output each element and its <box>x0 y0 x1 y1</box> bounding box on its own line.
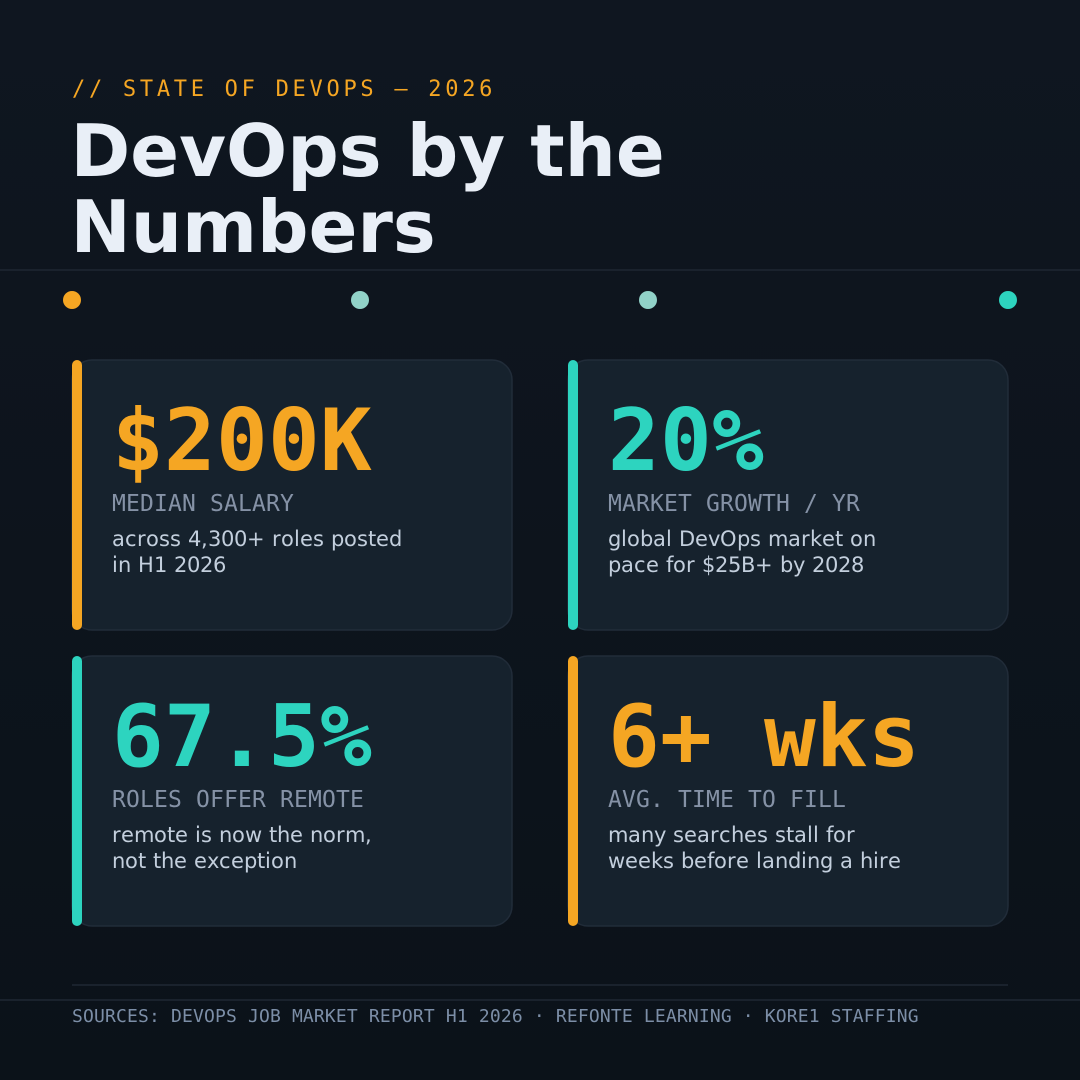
eyebrow label: // STATE OF DEVOPS — 2026 <box>72 77 496 102</box>
panel: remote roles <box>71 655 513 927</box>
card background <box>71 359 513 631</box>
stat description: across 4,300+ roles posted <box>112 527 402 551</box>
stat label: MARKET GROWTH / YR <box>608 491 860 517</box>
stat value: 6+ wks <box>608 687 920 787</box>
accent bar <box>72 656 82 926</box>
stat value: 67.5% <box>112 687 372 787</box>
card background <box>567 359 1009 631</box>
stat description: pace for $25B+ by 2028 <box>608 553 864 577</box>
title: DevOps by the <box>70 109 665 193</box>
stat description <box>608 527 876 577</box>
stat label: MEDIAN SALARY <box>112 491 294 517</box>
stat label: ROLES OFFER REMOTE <box>112 787 364 813</box>
panel: market growth <box>567 359 1009 631</box>
accent bar <box>568 360 578 630</box>
stat value: $200K <box>112 391 372 491</box>
title: Numbers <box>70 185 436 269</box>
card background <box>71 655 513 927</box>
stat label: AVG. TIME TO FILL <box>608 787 846 813</box>
stat description: remote is now the norm, <box>112 823 372 847</box>
stat description: not the exception <box>112 849 297 873</box>
stat description <box>112 527 402 577</box>
dot: teal <box>999 291 1017 309</box>
card background <box>567 655 1009 927</box>
accent bar <box>72 360 82 630</box>
dot: pale teal left <box>351 291 369 309</box>
accent bar <box>568 656 578 926</box>
stat description: global DevOps market on <box>608 527 876 551</box>
panel: time to fill <box>567 655 1009 927</box>
stat description: in H1 2026 <box>112 553 226 577</box>
dot: amber <box>63 291 81 309</box>
footer sources: SOURCES: DEVOPS JOB MARKET REPORT H1 2026 · REFONTE LEARNING · KORE1 STAFFING <box>72 1006 919 1027</box>
stat value: 20% <box>608 391 764 491</box>
dot: pale teal right <box>639 291 657 309</box>
title <box>70 109 665 269</box>
stat description <box>112 823 372 873</box>
panel: median salary <box>71 359 513 631</box>
stat description: many searches stall for <box>608 823 855 847</box>
stat description: weeks before landing a hire <box>608 849 901 873</box>
stat description <box>608 823 901 873</box>
